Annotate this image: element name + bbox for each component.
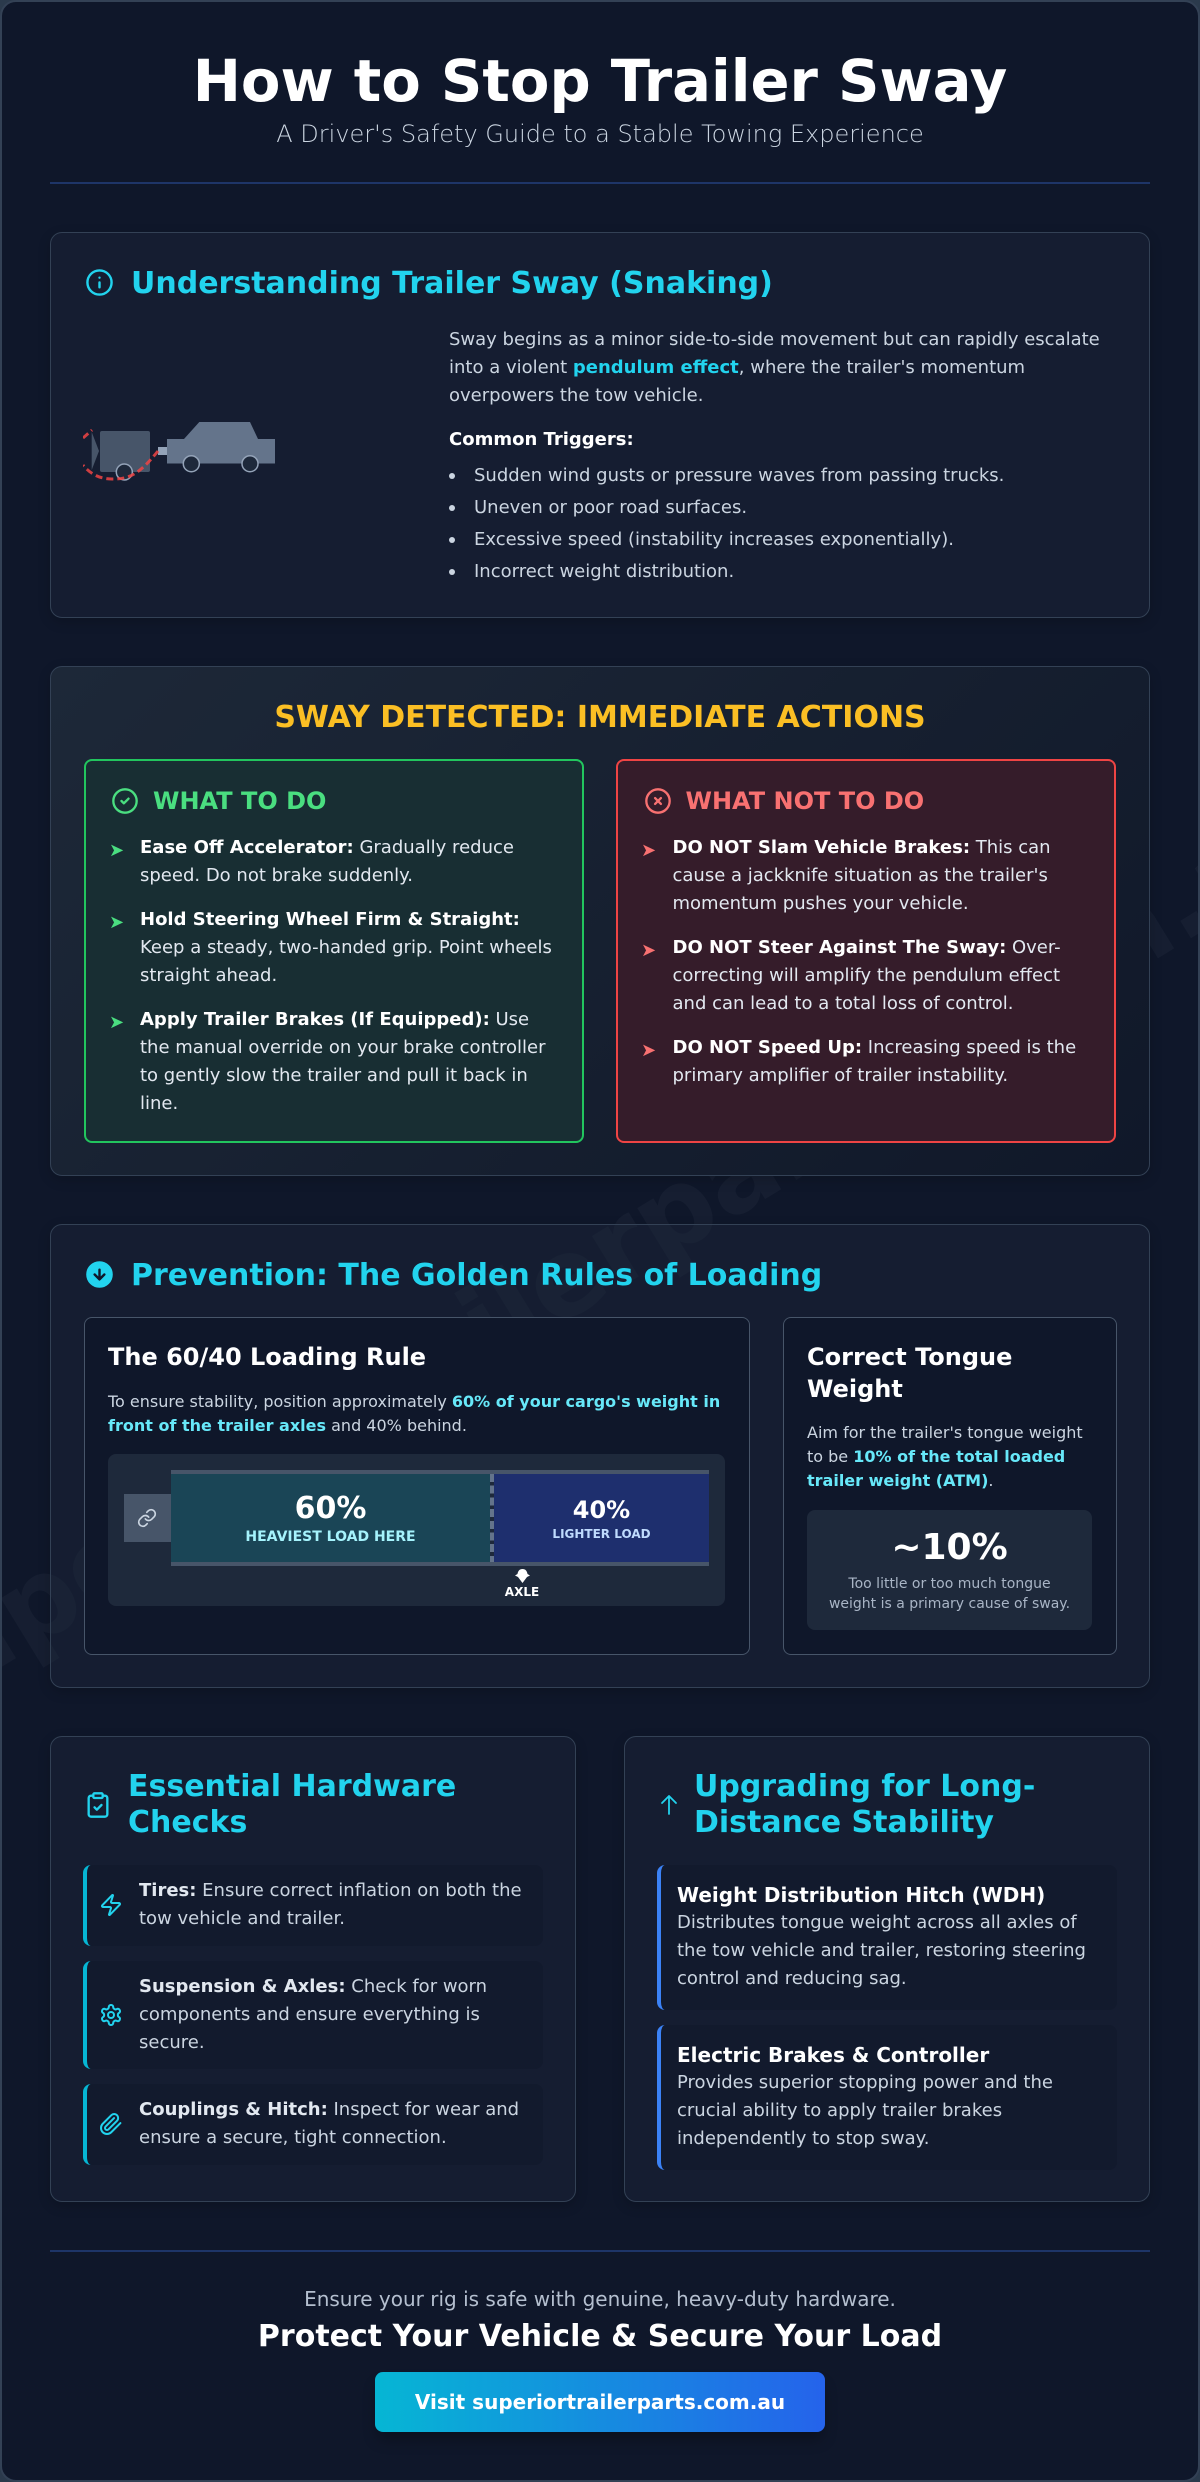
heading: tongue weight xyxy=(807,1343,1012,1403)
40 percent zone xyxy=(494,1474,709,1562)
item: apply trailer brakes: Apply Trailer Brakes (If Equipped): Use xyxy=(140,1009,529,1030)
text: wdh: Distributes tongue weight across all axles of xyxy=(677,1912,1077,1933)
text: couplings xyxy=(139,2099,519,2148)
header: title and subtitle xyxy=(50,40,1150,184)
card: tires xyxy=(83,1865,543,1946)
title: How to Stop Trailer Sway xyxy=(193,48,1007,114)
item: apply trailer brakes: to gently slow the trailer and pull it back in xyxy=(140,1065,528,1086)
item: speed up: DO NOT Speed Up: Increasing speed is the xyxy=(672,1037,1076,1058)
text: tires: Tires: Ensure correct inflation on both the xyxy=(139,1880,522,1901)
list: triggers: Uneven or poor road surfaces. xyxy=(474,497,747,518)
text: couplings: Couplings & Hitch: Inspect for wear and xyxy=(139,2099,519,2120)
text: wdh: the tow vehicle and trailer, restoring steering xyxy=(677,1940,1086,1961)
item: hold steering: Keep a steady, two-handed grip. Point wheels xyxy=(140,937,552,958)
heading: Upgrading for Long- xyxy=(694,1769,1035,1804)
text: footer tagline: Ensure your rig is safe with genuine, heavy-duty hardware. xyxy=(304,2287,896,2311)
item: ease off: Ease Off Accelerator: Gradually reduce xyxy=(140,837,514,858)
text: wdh: control and reducing sag. xyxy=(677,1968,907,1989)
heading: Essential Hardware xyxy=(128,1769,456,1804)
text: suspension: components and ensure everything is xyxy=(139,2004,480,2025)
item: steer against: correcting will amplify the pendulum effect xyxy=(672,965,1060,986)
panel: understanding trailer sway xyxy=(50,232,1150,618)
heading: tongue weight: Correct Tongue xyxy=(807,1343,1012,1371)
item: apply trailer brakes: line. xyxy=(140,1093,178,1114)
stat box xyxy=(807,1510,1092,1630)
text: electric brakes xyxy=(677,2043,1053,2149)
caption: Too little or too much tongue xyxy=(848,1576,1051,1592)
panel: sway detected immediate actions xyxy=(50,666,1150,1176)
arrow: ➤ xyxy=(641,1040,656,1061)
text: 60/40 explanation xyxy=(108,1392,720,1435)
panel: what not to do xyxy=(616,759,1116,1143)
icon: axle pin xyxy=(515,1569,530,1583)
text: suspension: secure. xyxy=(139,2032,205,2053)
text: tires: tow vehicle and trailer. xyxy=(139,1908,345,1929)
icon: gear xyxy=(101,2004,121,2026)
icon: check circle xyxy=(112,788,138,814)
item: hold steering: Hold Steering Wheel Firm & Straight: xyxy=(140,909,520,930)
caption: weight is a primary cause of sway. xyxy=(829,1596,1070,1612)
item: slam brakes xyxy=(672,837,1051,914)
button: visit website xyxy=(375,2372,825,2432)
item: hold steering: straight ahead. xyxy=(140,965,277,986)
heading: what to do: WHAT TO DO xyxy=(153,787,326,815)
panel: essential hardware checks xyxy=(50,1736,576,2202)
text: tongue weight explanation: to be 10% of the total loaded xyxy=(807,1447,1065,1466)
text: couplings: ensure a secure, tight connection. xyxy=(139,2127,447,2148)
axle divider dashed xyxy=(490,1474,494,1562)
arrow: ➤ xyxy=(641,840,656,861)
icon: clipboard check xyxy=(88,1792,108,1818)
text: electric brakes: Electric Brakes & Controller xyxy=(677,2043,989,2067)
heading: Distance Stability xyxy=(694,1805,994,1840)
text: 60/40 explanation: To ensure stability, position approximately 60% of your cargo's weight in xyxy=(108,1392,720,1411)
arrow: ➤ xyxy=(641,940,656,961)
axle marker xyxy=(504,1569,539,1599)
text: footer headline: Protect Your Vehicle & Secure Your Load xyxy=(258,2319,942,2354)
paragraph: sway description: overpowers the tow vehicle. xyxy=(449,385,703,406)
panel: 60/40 loading rule xyxy=(84,1317,750,1655)
rail top xyxy=(171,1470,709,1474)
label: heaviest load: HEAVIEST LOAD HERE xyxy=(245,1529,416,1545)
item: steer against xyxy=(672,937,1061,1014)
arrow: ➤ xyxy=(109,840,124,861)
item: slam brakes: cause a jackknife situation as the trailer's xyxy=(672,865,1048,886)
subheading: common triggers: Common Triggers: xyxy=(449,429,634,450)
paragraph: sway description: Sway begins as a minor side-to-side movement but can rapidly escalate xyxy=(449,329,1100,350)
list: what to do xyxy=(109,837,552,1114)
caption xyxy=(829,1576,1070,1612)
card: couplings xyxy=(83,2084,543,2165)
icon: x circle xyxy=(645,788,671,814)
list: what not to do xyxy=(641,837,1076,1086)
button: visit website: Visit superiortrailerparts.com.au xyxy=(415,2390,785,2414)
hitch block with link icon xyxy=(124,1494,171,1542)
text: electric brakes: crucial ability to apply trailer brakes xyxy=(677,2100,1002,2121)
item: hold steering xyxy=(140,909,552,986)
rail bottom xyxy=(171,1562,709,1566)
value: ~10%: ~10% xyxy=(891,1526,1008,1568)
heading: 60/40: The 60/40 Loading Rule xyxy=(108,1343,426,1371)
60 percent zone xyxy=(171,1474,490,1562)
text: tongue weight explanation xyxy=(807,1423,1083,1490)
value: 40%: 40% xyxy=(573,1496,630,1524)
card: weight distribution hitch xyxy=(657,1865,1117,2010)
card: suspension xyxy=(83,1961,543,2069)
panel: prevention golden rules xyxy=(50,1224,1150,1688)
icon: filled arrow down circle xyxy=(86,1261,113,1288)
heading xyxy=(128,1769,456,1840)
list: triggers: Sudden wind gusts or pressure waves from passing trucks. xyxy=(474,465,1004,486)
text: wdh: Weight Distribution Hitch (WDH) xyxy=(677,1883,1045,1907)
text: electric brakes: Provides superior stopping power and the xyxy=(677,2072,1053,2093)
text: 60/40 explanation: front of the trailer axles and 40% behind. xyxy=(108,1416,467,1435)
list: triggers: Excessive speed (instability increases exponentially). xyxy=(474,529,954,550)
value: 60%: 60% xyxy=(295,1490,366,1526)
item: speed up: primary amplifier of trailer instability. xyxy=(672,1065,1008,1086)
heading: SWAY DETECTED: IMMEDIATE ACTIONS xyxy=(274,700,926,734)
text: tires xyxy=(139,1880,522,1929)
text: tongue weight explanation: trailer weight (ATM). xyxy=(807,1471,994,1490)
item: speed up xyxy=(672,1037,1076,1086)
item: slam brakes: momentum pushes your vehicle. xyxy=(672,893,969,914)
label: axle: AXLE xyxy=(505,1585,539,1599)
heading: what not to do: WHAT NOT TO DO xyxy=(686,787,924,815)
text: suspension: Suspension & Axles: Check for worn xyxy=(139,1976,487,1997)
paragraph: sway description xyxy=(449,329,1100,406)
text: electric brakes: independently to stop sway. xyxy=(677,2128,929,2149)
heading: Prevention: The Golden Rules of Loading xyxy=(131,1258,822,1292)
label: lighter load: LIGHTER LOAD xyxy=(552,1527,651,1541)
icon: paperclip xyxy=(100,2113,122,2135)
panel: what to do xyxy=(84,759,584,1143)
arrow: ➤ xyxy=(109,1012,124,1033)
heading: tongue weight: Weight xyxy=(807,1375,903,1403)
item: apply trailer brakes xyxy=(140,1009,546,1114)
list: triggers xyxy=(449,465,1004,582)
item: steer against: and can lead to a total loss of control. xyxy=(672,993,1014,1014)
paragraph: sway description: into a violent pendulum effect, where the trailer's momentum xyxy=(449,357,1025,378)
heading: Checks xyxy=(128,1805,247,1840)
illustration: car towing swaying trailer xyxy=(83,422,275,481)
text: tongue weight explanation: Aim for the trailer's tongue weight xyxy=(807,1423,1083,1442)
text: wdh xyxy=(677,1883,1086,1989)
item: ease off xyxy=(140,837,514,886)
card: electric brakes xyxy=(657,2025,1117,2170)
item: steer against: DO NOT Steer Against The Sway: Over- xyxy=(672,937,1061,958)
item: ease off: speed. Do not brake suddenly. xyxy=(140,865,413,886)
panel: correct tongue weight xyxy=(782,1317,1117,1655)
footer xyxy=(50,2250,1150,2440)
item: slam brakes: DO NOT Slam Vehicle Brakes: This can xyxy=(672,837,1051,858)
text: suspension xyxy=(139,1976,487,2053)
heading xyxy=(694,1769,1035,1840)
diagram: trailer load distribution xyxy=(108,1454,725,1606)
subtitle: A Driver's Safety Guide to a Stable Towing Experience xyxy=(276,120,924,148)
icon: info xyxy=(86,269,113,296)
icon: zap xyxy=(101,1894,121,1916)
item: apply trailer brakes: the manual override on your brake controller xyxy=(140,1037,545,1058)
panel: upgrading for long-distance stability xyxy=(624,1736,1150,2202)
icon: link xyxy=(138,1508,156,1528)
arrow: ➤ xyxy=(109,912,124,933)
list: triggers: Incorrect weight distribution. xyxy=(474,561,734,582)
icon: arrow up xyxy=(661,1795,677,1815)
heading: Understanding Trailer Sway (Snaking) xyxy=(131,266,773,300)
